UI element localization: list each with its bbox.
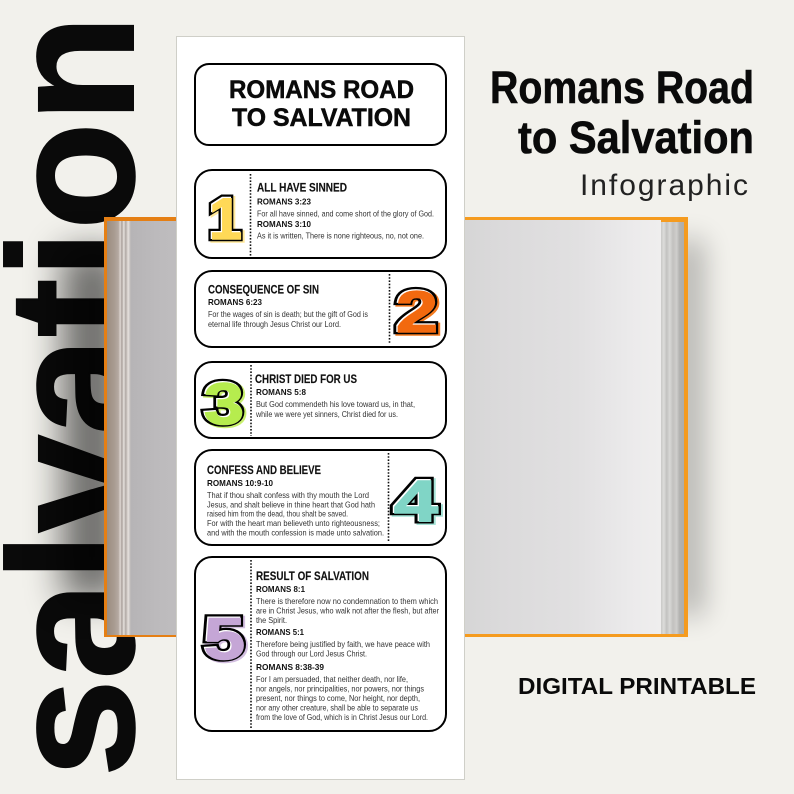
step 2 text: ROMANS 6:23: [208, 297, 262, 307]
step 4 text: and with the mouth confession is made unto salvation.: [207, 528, 384, 538]
number 4: 4: [394, 469, 438, 534]
step 5 text: ROMANS 8:1: [256, 584, 305, 594]
open book: [104, 217, 688, 637]
number 4: [393, 468, 439, 534]
number 3: 3: [205, 372, 245, 438]
step 4 text: CONFESS AND BELIEVE: [207, 463, 321, 477]
heading: to Salvation: [518, 112, 754, 163]
heading: [490, 62, 754, 163]
number 1: 1: [210, 188, 243, 252]
poster title: [195, 64, 446, 145]
number 5: 5: [203, 606, 244, 671]
step 1 text: ROMANS 3:23: [257, 196, 311, 206]
number 5: 5: [205, 608, 246, 672]
step 1 text: For all have sinned, and come short of the glory of God.: [257, 208, 434, 218]
step 3 text: But God commendeth his love toward us, in that,: [256, 399, 415, 409]
step 2 text: eternal life through Jesus Christ our Lord.: [208, 319, 341, 329]
step 4 text: Jesus, and shalt believe in thine heart that God hath: [207, 500, 375, 510]
number 3: 3: [204, 372, 244, 437]
step 5 text: are in Christ Jesus, who walk not after the flesh, but after: [256, 606, 439, 616]
step 5 text: God through our Lord Jesus Christ.: [256, 648, 367, 658]
number 4: 4: [395, 470, 439, 534]
step 1: all have sinned: [195, 170, 446, 258]
step 4 text: For with the heart man believeth unto righteousness;: [207, 518, 380, 528]
number 5: 5: [203, 606, 244, 671]
step 3: christ died for us: [195, 362, 446, 438]
step 2: consequence of sin: [195, 271, 446, 347]
step 1 text: ROMANS 3:10: [257, 219, 311, 229]
number 2: 2: [395, 279, 437, 344]
poster sheet: [176, 36, 464, 780]
step 5 text: the Spirit.: [256, 615, 287, 625]
poster title: ROMANS ROAD: [229, 76, 414, 104]
step 5 text: nor angels, nor principalities, nor powers, nor things: [256, 684, 424, 694]
number 2: 2: [395, 279, 437, 344]
number 1: 1: [208, 186, 241, 251]
number 3: 3: [203, 371, 243, 436]
subheading: Infographic: [580, 169, 748, 202]
number 1: 1: [208, 186, 241, 251]
step 1 text: As it is written, There is none righteous, no, not one.: [257, 230, 424, 240]
step 5 text: present, nor things to come, Nor height, nor depth,: [256, 693, 420, 703]
step 5 text: nor any other creature, shall be able to separate us: [256, 702, 418, 712]
step 5 text: Therefore being justified by faith, we have peace with: [256, 639, 430, 649]
book shadow: [62, 240, 703, 615]
step 5 text: There is therefore now no condemnation to them which: [256, 596, 438, 606]
number 3: 3: [203, 371, 243, 436]
number 5: 5: [204, 607, 245, 672]
number 4: 4: [393, 468, 437, 533]
step 5: result of salvation: [195, 557, 446, 731]
step 2 text: CONSEQUENCE OF SIN: [208, 282, 319, 296]
step 1 text: [257, 180, 434, 240]
step 5 text: RESULT OF SALVATION: [256, 569, 369, 583]
step 3 text: [255, 372, 415, 419]
step 3 text: CHRIST DIED FOR US: [255, 372, 357, 386]
step 1 text: ALL HAVE SINNED: [257, 180, 347, 194]
number 2: 2: [396, 280, 438, 345]
step 2 text: [208, 282, 368, 329]
step 4: confess and believe: [195, 450, 446, 545]
step 4 text: [207, 463, 384, 538]
step 3 text: ROMANS 5:8: [256, 387, 306, 397]
step 5 text: ROMANS 5:1: [256, 627, 304, 637]
step 5 text: ROMANS 8:38-39: [256, 662, 324, 672]
number 4: 4: [393, 468, 437, 533]
number 1: 1: [209, 187, 242, 252]
digital printable label: DIGITAL PRINTABLE: [518, 673, 756, 699]
step 4 text: raised him from the dead, thou shalt be saved.: [207, 508, 348, 518]
step 2 text: For the wages of sin is death; but the gift of God is: [208, 309, 368, 319]
heading: Romans Road: [490, 62, 754, 113]
step 4 text: That if thou shalt confess with thy mouth the Lord: [207, 490, 369, 500]
step 5 text: [256, 569, 439, 722]
step 3 text: while we were yet sinners, Christ died for us.: [255, 409, 398, 419]
step 5 text: from the love of God, which is in Christ Jesus our Lord.: [256, 712, 428, 722]
poster title: TO SALVATION: [232, 104, 411, 132]
number 2: 2: [397, 280, 439, 346]
step 4 text: ROMANS 10:9-10: [207, 478, 273, 488]
step 5 text: For I am persuaded, that neither death, nor life,: [256, 674, 408, 684]
